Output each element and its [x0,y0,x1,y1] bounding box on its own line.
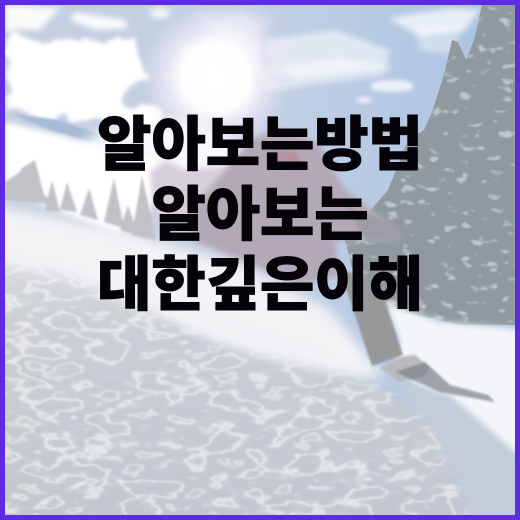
skier body [190,128,400,285]
heading text [97,112,423,318]
blue shadow wedge [392,378,520,520]
clouds [5,5,480,235]
blue cloud streak [12,114,120,150]
distant tree line [5,160,156,240]
pink treetops behind skier [150,160,262,250]
bright horizon haze [75,120,245,200]
right bright snowfield [385,302,520,480]
heading line 1: 알아보는방법 [97,112,423,178]
evergreen trees right [340,5,515,330]
heading line 3: 대한깊은이해 [97,252,423,318]
heading line 2: 알아보는 [151,182,369,248]
snowboarder leg [340,270,403,366]
upper bright snow slope [0,205,385,380]
sun glow [140,3,290,153]
boot and board [380,355,430,382]
lower textured snow [5,262,472,515]
